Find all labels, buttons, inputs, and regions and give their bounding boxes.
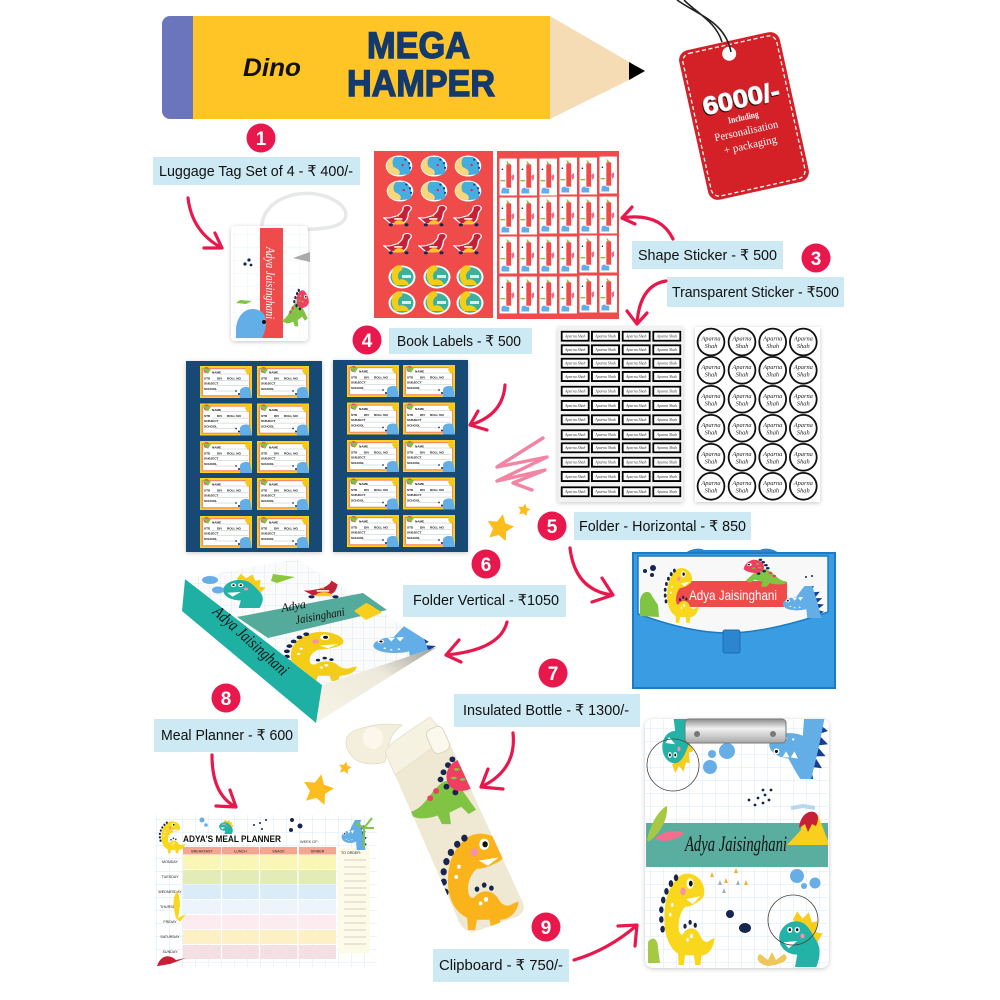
label: shape sticker: Shape Sticker - ₹ 500 <box>638 247 777 264</box>
label: folder vertical <box>403 585 566 617</box>
pencil eraser <box>162 16 193 119</box>
planner to order column: TO ORDER: <box>341 851 361 855</box>
planner column titles: SNACK <box>272 850 285 854</box>
label: meal planner <box>154 719 298 752</box>
label: transparent sticker: Transparent Sticker - ₹500 <box>672 284 839 301</box>
folder spine name: Adya Jaisinghani <box>209 601 293 680</box>
folder name band <box>237 593 387 638</box>
tag string <box>677 0 731 52</box>
label: meal planner: Meal Planner - ₹ 600 <box>161 727 293 744</box>
planner column titles: DINNER <box>311 850 325 854</box>
bottle lid latch <box>363 727 383 749</box>
arrow to book labels <box>470 385 505 430</box>
label: book labels: Book Labels - ₹ 500 <box>397 333 521 350</box>
label: folder horizontal: Folder - Horizontal - ₹ 850 <box>579 518 746 535</box>
arrow to luggage tag <box>188 198 222 248</box>
bottle body <box>395 737 524 932</box>
planner column titles <box>191 850 325 854</box>
number badge 4: 4 <box>362 331 373 352</box>
folder dino art <box>202 574 436 681</box>
folder clasp <box>723 630 740 653</box>
number badge 1: 1 <box>256 129 267 150</box>
planner day labels: TUESDAY <box>161 875 179 879</box>
item 1: luggage tag <box>153 124 360 341</box>
label: luggage tag: Luggage Tag Set of 4 - ₹ 400/- <box>159 163 353 180</box>
item 2: shape stickers sheet <box>374 151 493 318</box>
planner day labels: SUNDAY <box>162 950 178 954</box>
luggage tag red strip with name: Adya Jaisinghani <box>263 246 278 319</box>
clipboard band with name <box>646 823 828 867</box>
number badge 7: 7 <box>548 664 558 685</box>
luggage tag red strip with name <box>260 228 283 338</box>
tag details: + packaging <box>723 133 779 157</box>
folder handle <box>685 549 780 554</box>
label: clipboard <box>433 949 569 982</box>
folder body <box>633 553 835 688</box>
clipboard band with name: Adya Jaisinghani <box>684 831 787 856</box>
label: folder vertical: Folder Vertical - ₹1050 <box>413 592 559 609</box>
tag body <box>677 30 811 202</box>
folder name band: Jaisinghani <box>294 604 346 627</box>
label: luggage tag <box>153 157 360 185</box>
pink scribble <box>497 438 547 490</box>
tag details <box>710 105 783 158</box>
arrow to shape stickers <box>622 207 673 239</box>
number badge 9: 9 <box>541 918 551 939</box>
transparent round stickers sheet <box>695 327 820 502</box>
folder back cover <box>316 647 437 723</box>
horizontal folder <box>633 549 835 688</box>
planner day labels: WEDNESDAY <box>158 890 182 894</box>
pencil body <box>193 16 550 119</box>
subtitle: Dino: Dino <box>243 54 301 82</box>
bottle button <box>424 724 452 756</box>
title: MEGA HAMPER: MEGA <box>367 25 470 66</box>
bottle dinos <box>408 756 518 930</box>
title: MEGA HAMPER: HAMPER <box>347 63 495 104</box>
arrow to transparent stickers <box>627 281 666 324</box>
arrow to vertical folder <box>446 622 507 662</box>
planner meal rows <box>183 855 336 959</box>
clipboard board <box>645 719 829 968</box>
item 2: name stickers sheet <box>497 151 619 319</box>
insulated bottle <box>346 717 524 932</box>
planner dinos <box>157 818 374 966</box>
pencil lead <box>629 62 645 80</box>
tag details: Personalisation <box>713 118 780 144</box>
label: transparent sticker <box>667 277 844 307</box>
number badge 6: 6 <box>481 555 491 576</box>
vertical folder <box>182 559 437 723</box>
planner column titles: BREAKFAST <box>191 850 213 854</box>
number badge 3 <box>802 244 830 272</box>
tag hole <box>721 45 738 62</box>
number badge 7 <box>538 658 568 688</box>
arrow to meal planner <box>212 755 236 807</box>
planner day labels: MONDAY <box>162 860 178 864</box>
planner header row <box>183 847 336 854</box>
price tag <box>677 0 811 202</box>
folder top face <box>185 559 437 685</box>
folder name banner <box>670 581 787 607</box>
number badge 1 <box>246 124 276 152</box>
number badge 9 <box>532 912 560 942</box>
label: shape sticker <box>632 241 783 269</box>
folder name banner: Adya Jaisinghani <box>689 587 777 603</box>
luggage tag strap <box>262 193 346 236</box>
luggage tag card <box>231 226 308 341</box>
book labels sheet left <box>186 361 322 552</box>
label: folder horizontal <box>574 512 751 540</box>
clipboard leaves <box>647 806 684 842</box>
pencil wood tip <box>550 16 629 119</box>
meal planner <box>155 815 377 967</box>
bottle lid <box>346 724 402 764</box>
planner to order column <box>338 848 370 953</box>
bottle orange dino <box>441 834 518 930</box>
tag price: 6000/- <box>700 77 782 121</box>
clipboard volcano <box>787 812 828 845</box>
week of label: WEEK OF: <box>300 840 319 844</box>
label: insulated bottle <box>454 694 640 727</box>
big star pair near bottle <box>304 761 352 805</box>
clipboard top art <box>647 719 828 808</box>
clipboard bottom art <box>648 868 823 967</box>
planner day labels: FRIDAY <box>163 920 177 924</box>
number badge 8 <box>212 684 240 712</box>
number badge 8: 8 <box>221 689 231 710</box>
luggage tag dino art <box>236 252 310 338</box>
folder spine <box>182 579 322 723</box>
stars near book labels <box>488 503 531 541</box>
pencil banner title <box>162 16 645 119</box>
tag details: Including <box>727 109 760 125</box>
number badge 3: 3 <box>811 249 821 270</box>
folder name band: Adya <box>279 597 307 615</box>
clipboard metal clip <box>685 719 786 743</box>
label: book labels <box>389 328 532 354</box>
folder flap <box>638 556 828 633</box>
label: clipboard: Clipboard - ₹ 750/- <box>439 957 563 974</box>
arrow to horizontal folder <box>570 548 613 602</box>
planner day labels: THURSDAY <box>160 905 181 909</box>
number badge 5: 5 <box>547 517 558 538</box>
bottle green dino <box>408 756 479 824</box>
book labels sheet right <box>333 360 468 552</box>
number badge 5 <box>538 512 566 540</box>
planner column titles: LUNCH <box>234 850 247 854</box>
planner day labels: SATURDAY <box>160 935 180 939</box>
label: insulated bottle: Insulated Bottle - ₹ 1300/- <box>463 702 629 719</box>
title: MEGA HAMPER <box>347 25 495 104</box>
folder dinos <box>640 559 824 623</box>
arrow to clipboard <box>574 925 637 960</box>
number badge 4 <box>352 326 382 354</box>
clipboard <box>645 719 829 968</box>
planner title: ADYA'S MEAL PLANNER <box>183 834 281 845</box>
transparent rectangle stickers sheet <box>558 327 683 502</box>
number badge 6 <box>472 550 500 578</box>
planner day labels <box>158 860 182 954</box>
bottle collar <box>385 717 447 775</box>
arrow to bottle <box>481 733 513 789</box>
